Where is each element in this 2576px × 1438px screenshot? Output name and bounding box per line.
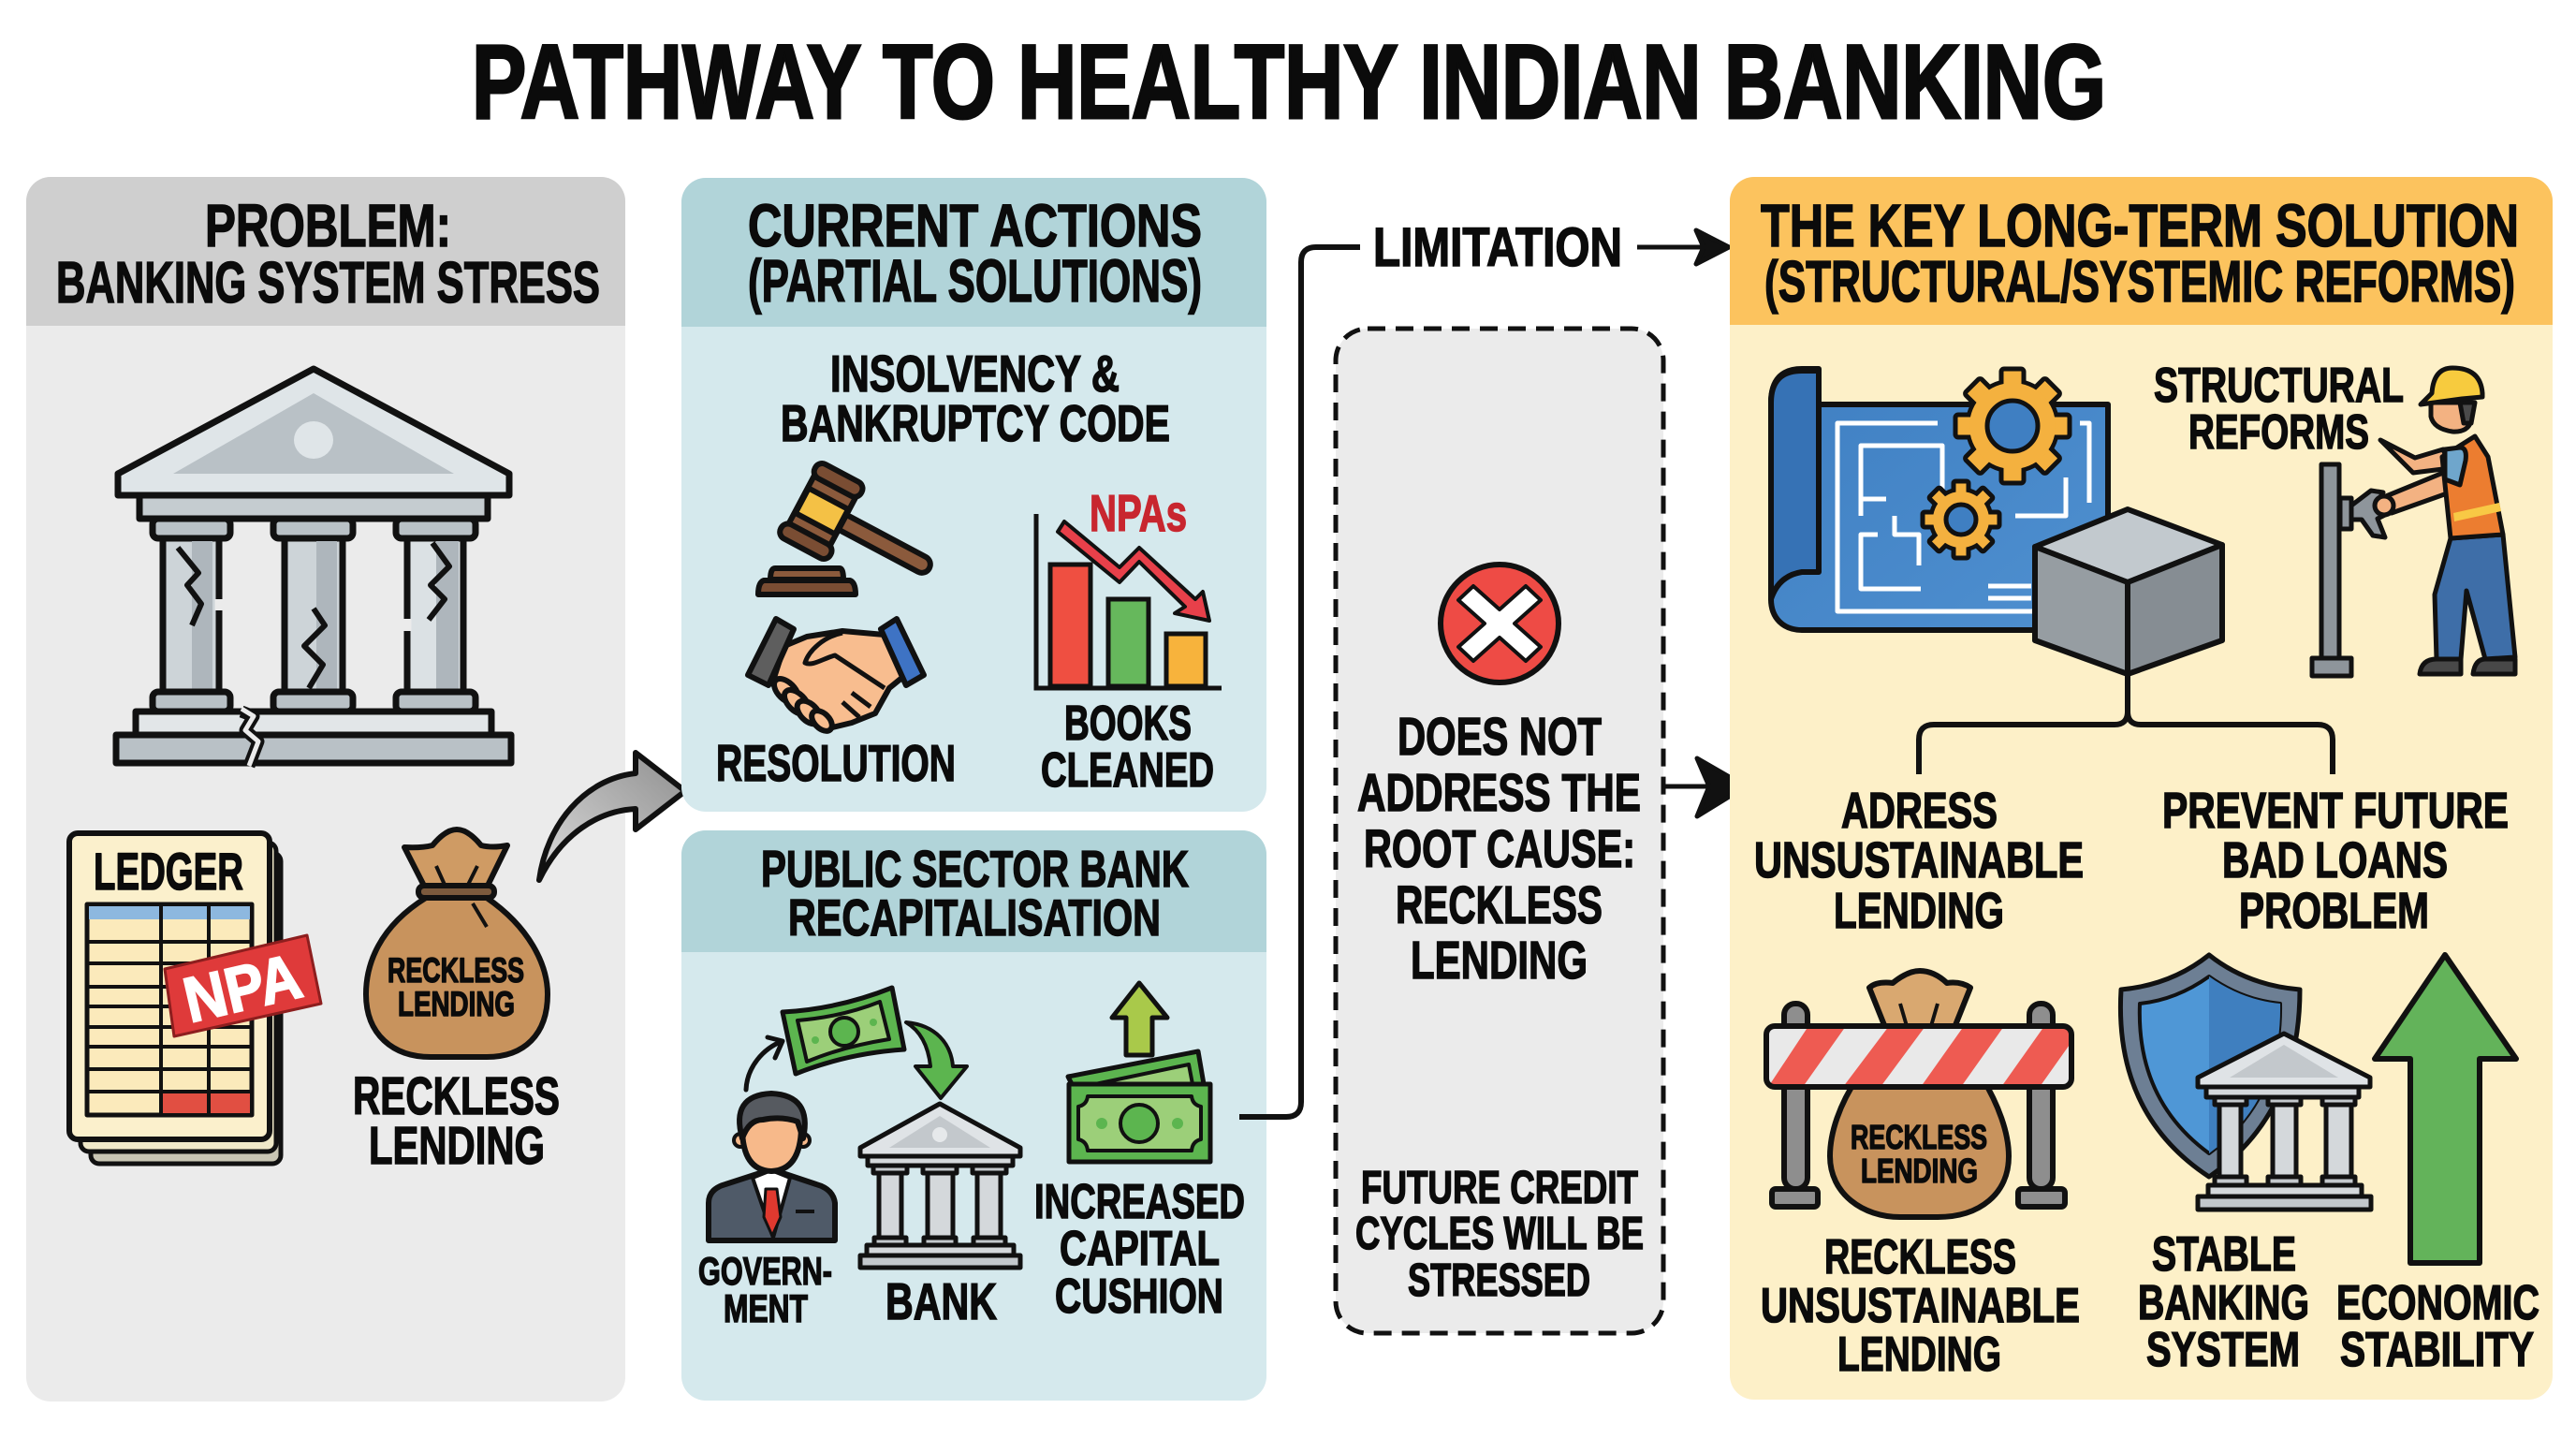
icon: barrier blocking bag: RECKLESS <box>1851 1118 1987 1156</box>
tree connector <box>1919 674 2333 774</box>
solution header <box>1730 177 2553 325</box>
ledger label: LEDGER <box>94 842 243 901</box>
limitation statement <box>1357 707 1641 990</box>
increased capital cushion label: CAPITAL <box>1060 1222 1220 1276</box>
bank label: BANK <box>886 1272 997 1330</box>
icon: barrier blocking bag: LENDING <box>1861 1152 1978 1190</box>
insolvency heading <box>781 345 1170 452</box>
stable banking label <box>2138 1227 2309 1377</box>
panel: problem <box>26 177 625 1401</box>
resolution label: RESOLUTION <box>716 734 956 792</box>
future credit note: FUTURE CREDIT <box>1361 1163 1638 1213</box>
current actions header: CURRENT ACTIONS <box>748 192 1202 259</box>
arrow: limitation to solution <box>1637 230 1729 264</box>
problem header: BANKING SYSTEM STRESS <box>56 251 600 315</box>
recapitalisation header: RECAPITALISATION <box>788 888 1161 946</box>
limitation statement: ADDRESS THE <box>1357 763 1641 823</box>
icon: reckless lending bag: RECKLESS <box>388 951 524 990</box>
arrow: government to note <box>746 1037 783 1090</box>
icon: reckless lending bag <box>366 829 548 1057</box>
icon: barrier blocking bag <box>1766 971 2083 1217</box>
icon: worker at valve <box>2312 368 2515 676</box>
adress lending label: UNSUSTAINABLE <box>1754 832 2084 888</box>
chart: NPAs falling: NPAs <box>1090 484 1187 542</box>
reckless unsustainable label: UNSUSTAINABLE <box>1761 1279 2080 1333</box>
panel: recapitalisation <box>681 830 1266 1401</box>
limitation statement: ROOT CAUSE: <box>1364 819 1635 879</box>
panel: insolvency code <box>681 178 1266 812</box>
government label <box>698 1249 832 1330</box>
chart: NPAs falling <box>1036 484 1222 688</box>
icon: red cross <box>1441 565 1559 682</box>
connector: limitation line <box>1239 247 1360 1117</box>
adress lending label <box>1754 783 2084 939</box>
reckless unsustainable label <box>1761 1230 2080 1382</box>
limitation label: LIMITATION <box>1373 217 1622 278</box>
reckless lending label <box>353 1066 560 1176</box>
icon: handshake <box>748 619 924 735</box>
structural reforms label: STRUCTURAL <box>2154 359 2404 413</box>
icon: stable bank <box>2198 1034 2371 1210</box>
stable banking label: BANKING <box>2138 1276 2309 1330</box>
problem header: PROBLEM: <box>205 192 451 259</box>
future credit note: STRESSED <box>1408 1255 1590 1306</box>
books cleaned label: BOOKS <box>1064 697 1192 751</box>
structural reforms label <box>2154 359 2404 460</box>
icon: money stack <box>1068 1051 1210 1162</box>
icon: shield <box>2120 955 2300 1177</box>
increased capital cushion label: CUSHION <box>1055 1269 1223 1324</box>
icon: cracked bank <box>116 369 511 766</box>
stable banking label: SYSTEM <box>2146 1323 2300 1377</box>
limitation statement: LENDING <box>1411 931 1588 990</box>
limitation statement: RECKLESS <box>1396 875 1603 935</box>
economic stability label <box>2336 1276 2539 1377</box>
panel: long-term solution <box>1730 177 2553 1400</box>
recapitalisation header <box>681 830 1266 952</box>
future credit note <box>1355 1163 1644 1306</box>
increased capital cushion label: INCREASED <box>1034 1175 1245 1229</box>
arrow: limitation to reforms <box>1663 758 1746 816</box>
panel: limitation <box>1336 329 1663 1333</box>
icon: bank <box>860 1104 1020 1268</box>
icon: government official <box>709 1093 835 1240</box>
reckless lending label: RECKLESS <box>353 1066 560 1126</box>
icon: flying banknote <box>783 988 904 1074</box>
arrow: capital up <box>1112 983 1167 1055</box>
adress lending label: ADRESS <box>1841 783 1998 839</box>
insolvency heading: INSOLVENCY & <box>830 345 1120 403</box>
limitation statement: DOES NOT <box>1398 707 1602 767</box>
NPA stamp: NPA <box>177 941 308 1036</box>
government label: MENT <box>724 1286 808 1330</box>
future credit note: CYCLES WILL BE <box>1355 1209 1644 1259</box>
arrow: economic growth <box>2375 955 2516 1263</box>
icon: blueprint <box>1771 369 2108 630</box>
increased capital cushion label <box>1034 1175 1245 1324</box>
books cleaned label: CLEANED <box>1041 743 1214 798</box>
title: PATHWAY TO HEALTHY INDIAN BANKING <box>472 23 2106 140</box>
insolvency heading: BANKRUPTCY CODE <box>781 394 1170 452</box>
reckless unsustainable label: RECKLESS <box>1824 1230 2016 1284</box>
icon: gavel <box>758 460 949 606</box>
current actions header <box>681 178 1266 327</box>
prevent bad loans label: BAD LOANS <box>2222 832 2448 888</box>
gear large <box>1955 369 2070 483</box>
prevent bad loans label: PROBLEM <box>2239 883 2429 939</box>
arrow: problem to actions <box>539 753 685 880</box>
arrow: note to bank <box>906 1022 967 1098</box>
adress lending label: LENDING <box>1834 883 2004 939</box>
current actions header: (PARTIAL SOLUTIONS) <box>748 247 1202 315</box>
icon: reckless lending bag: LENDING <box>398 985 515 1023</box>
icon: cube <box>2035 509 2222 674</box>
reckless lending label: LENDING <box>369 1116 545 1176</box>
stable banking label: STABLE <box>2152 1227 2296 1282</box>
reckless unsustainable label: LENDING <box>1837 1328 2001 1382</box>
prevent bad loans label <box>2162 783 2509 939</box>
gear small <box>1923 481 1999 558</box>
government label: GOVERN- <box>698 1249 832 1293</box>
recapitalisation header: PUBLIC SECTOR BANK <box>761 840 1189 898</box>
structural reforms label: REFORMS <box>2188 405 2369 460</box>
books cleaned label <box>1041 697 1214 798</box>
problem header <box>26 177 625 326</box>
icon: ledger <box>69 833 281 1164</box>
